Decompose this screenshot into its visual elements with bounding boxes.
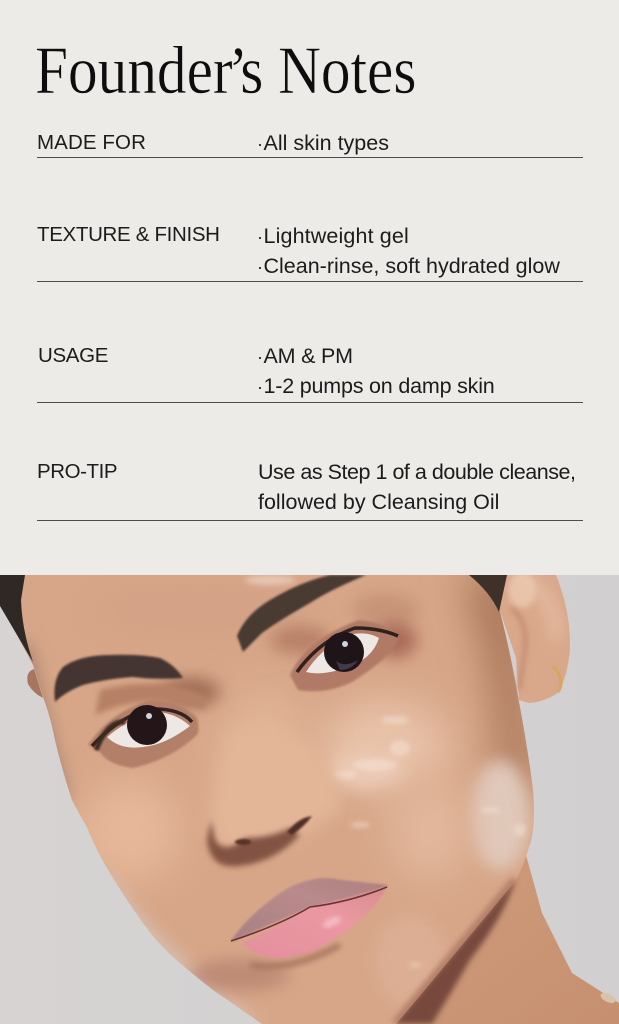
row: texture and finish: Clean-rinse, soft hydrated glow <box>264 254 560 278</box>
ear <box>499 572 570 703</box>
neck shadow <box>394 878 516 1024</box>
row: made for: · <box>257 134 263 154</box>
row: usage: 1-2 pumps on damp skin <box>264 374 495 398</box>
row: made for <box>37 131 389 155</box>
earring <box>553 666 561 692</box>
row: pro-tip <box>37 460 576 514</box>
neck <box>396 855 619 1024</box>
row: made for: All skin types <box>264 131 389 155</box>
necklace <box>599 991 617 1005</box>
row: texture and finish <box>37 223 560 278</box>
row: texture and finish: TEXTURE & FINISH <box>37 223 220 246</box>
left ear nub <box>27 669 43 698</box>
right eye <box>290 620 399 691</box>
row: pro-tip: PRO-TIP <box>37 460 117 483</box>
right eyebrow <box>237 575 366 652</box>
lips <box>230 878 389 966</box>
row: pro-tip: followed by Cleansing Oil <box>258 490 499 514</box>
row: usage: · <box>257 377 263 397</box>
skin specular highlights <box>263 716 526 967</box>
left eye <box>88 700 198 768</box>
nose <box>207 728 340 866</box>
title: Founder’s Notes <box>35 32 416 108</box>
row: texture and finish: · <box>257 227 263 247</box>
face skin <box>0 575 534 1024</box>
backdrop <box>0 575 619 1024</box>
forehead shine <box>245 575 295 585</box>
row: texture and finish: · <box>257 257 263 277</box>
row: usage <box>38 344 495 398</box>
row: usage: USAGE <box>38 344 108 367</box>
photo: close-up of face with glowing skin <box>0 575 619 1024</box>
row: texture and finish: Lightweight gel <box>264 224 409 248</box>
row: pro-tip: Use as Step 1 of a double cleanse, <box>258 460 576 484</box>
row: usage: AM & PM <box>264 344 353 368</box>
left eyebrow <box>54 655 183 702</box>
row: made for: MADE FOR <box>37 131 146 154</box>
row: usage: · <box>257 347 263 367</box>
skin shading and highlights <box>15 575 535 1024</box>
hair left <box>0 575 33 662</box>
hair right <box>469 575 507 612</box>
